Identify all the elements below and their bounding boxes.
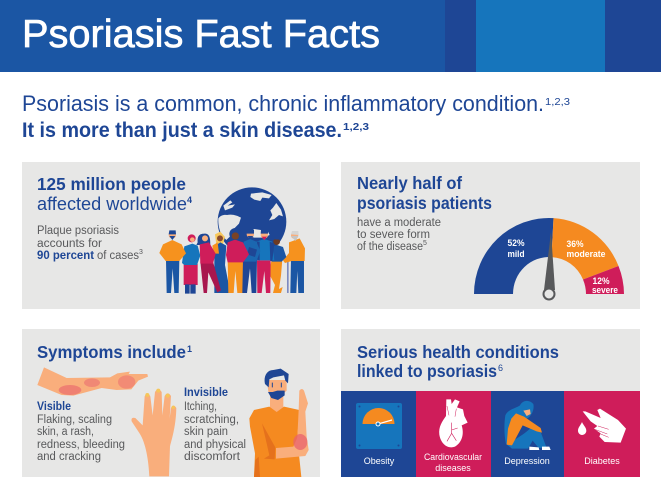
panel: nearly half of patients [341, 162, 640, 309]
tile: depression [491, 391, 564, 477]
text: invisible symptoms: skin pain [184, 426, 228, 438]
panel heading: 125 million people: 4 [187, 195, 192, 205]
text: plaque psoriasis: Plaque psoriasis [37, 225, 119, 237]
panel heading: 125 million people: 125 million people [37, 174, 186, 194]
panel heading: symptoms include: 1 [187, 344, 192, 354]
text: visible symptoms [37, 399, 125, 463]
person 1 [159, 230, 186, 293]
text: invisible symptoms [184, 385, 246, 463]
label: diabetes: Diabetes [584, 456, 620, 466]
icon: heart [439, 399, 468, 447]
text: visible symptoms: skin, a rash, [37, 426, 94, 438]
gauge label: mild: 52% [508, 238, 525, 249]
gauge label: moderate: 36% [566, 239, 584, 250]
tile: obesity [341, 391, 416, 477]
illustration: man scratching elbow [249, 369, 309, 477]
label: cardiovascular diseases [424, 452, 482, 473]
text: invisible symptoms: and physical [184, 439, 246, 451]
text: moderate to severe [357, 217, 441, 253]
text: invisible symptoms: Invisible [184, 385, 228, 399]
panel heading: serious health conditions: Serious health conditions [357, 342, 559, 362]
panel: symptoms [22, 329, 320, 477]
illustration: arm with rash [37, 367, 148, 396]
person 7 [255, 230, 274, 293]
panel heading: serious health conditions: linked to psoriasis [357, 361, 497, 381]
illustration: raised hand [131, 389, 176, 476]
panel heading: symptoms include: Symptoms include [37, 342, 186, 362]
gauge label: severe: 12% [592, 276, 610, 287]
panel: 125 million people [22, 162, 320, 309]
text: visible symptoms: and cracking [37, 451, 101, 463]
icon: hand with blood drop [578, 409, 626, 443]
text: moderate to severe: 5 [423, 240, 427, 247]
panel heading: nearly half: psoriasis patients [357, 193, 492, 213]
header banner [0, 0, 661, 72]
person 3 [196, 234, 221, 293]
text: plaque psoriasis: 3 [139, 249, 143, 256]
text: moderate to severe: have a moderate [357, 217, 441, 229]
text: visible symptoms: redness, bleeding [37, 439, 125, 451]
text: moderate to severe: of the disease [357, 241, 423, 253]
gauge segment: moderate [552, 218, 618, 280]
panel heading: nearly half [357, 173, 492, 213]
illustration: globe and crowd of people [159, 187, 305, 294]
panel: health conditions [341, 329, 640, 477]
panel heading: nearly half: Nearly half of [357, 173, 462, 193]
person 6 [239, 230, 260, 293]
gauge label: moderate [566, 239, 606, 260]
text: visible symptoms: Flaking, scaling [37, 414, 112, 426]
person 5 [226, 228, 249, 293]
text: plaque psoriasis: 90 percent [37, 248, 94, 262]
chart: severity gauge [474, 218, 624, 300]
gauge segment: mild [474, 218, 554, 294]
intro text: 1,2,3 [343, 121, 369, 133]
text: plaque psoriasis: accounts for [37, 238, 102, 250]
icon: scale [356, 403, 402, 449]
intro text: 1,2,3 [545, 96, 570, 108]
gauge label: mild [508, 238, 525, 260]
panel heading: serious health conditions [357, 342, 559, 381]
label: depression: Depression [504, 456, 550, 466]
text: invisible symptoms: discomfort [184, 451, 241, 463]
label: cardiovascular diseases: diseases [435, 463, 471, 473]
intro text: Psoriasis is a common, chronic inflammatory condition. [22, 91, 544, 116]
gauge label: moderate: moderate [566, 249, 606, 260]
panel heading: 125 million people: affected worldwide [37, 194, 187, 214]
title: Psoriasis Fast Facts [22, 13, 380, 56]
gauge segment: severe [583, 266, 624, 294]
text: moderate to severe: to severe form [357, 229, 430, 241]
panel heading: serious health conditions: 6 [498, 363, 503, 373]
person 2 [182, 234, 200, 294]
tile: cardiovascular diseases [416, 391, 491, 477]
icon: globe [218, 187, 286, 256]
panel heading: 125 million people [37, 174, 192, 214]
text: plaque psoriasis: of cases [97, 250, 139, 262]
text: plaque psoriasis [37, 225, 143, 262]
label: obesity: Obesity [364, 456, 395, 466]
gauge needle [544, 232, 555, 300]
text: invisible symptoms: Itching, [184, 401, 217, 413]
gauge label: severe [592, 276, 618, 296]
person 4 [212, 232, 230, 293]
text: invisible symptoms: scratching, [184, 414, 239, 426]
person 9 with cane [283, 231, 305, 293]
person 8 [269, 236, 286, 293]
label: cardiovascular diseases: Cardiovascular [424, 452, 482, 462]
gauge label: mild: mild [508, 249, 525, 260]
tile: diabetes [564, 391, 640, 477]
icon: seated figure [504, 401, 551, 450]
intro text: It is more than just a skin disease. [22, 119, 342, 142]
text: visible symptoms: Visible [37, 399, 71, 413]
gauge label: severe: severe [592, 285, 618, 296]
intro text [22, 91, 570, 142]
